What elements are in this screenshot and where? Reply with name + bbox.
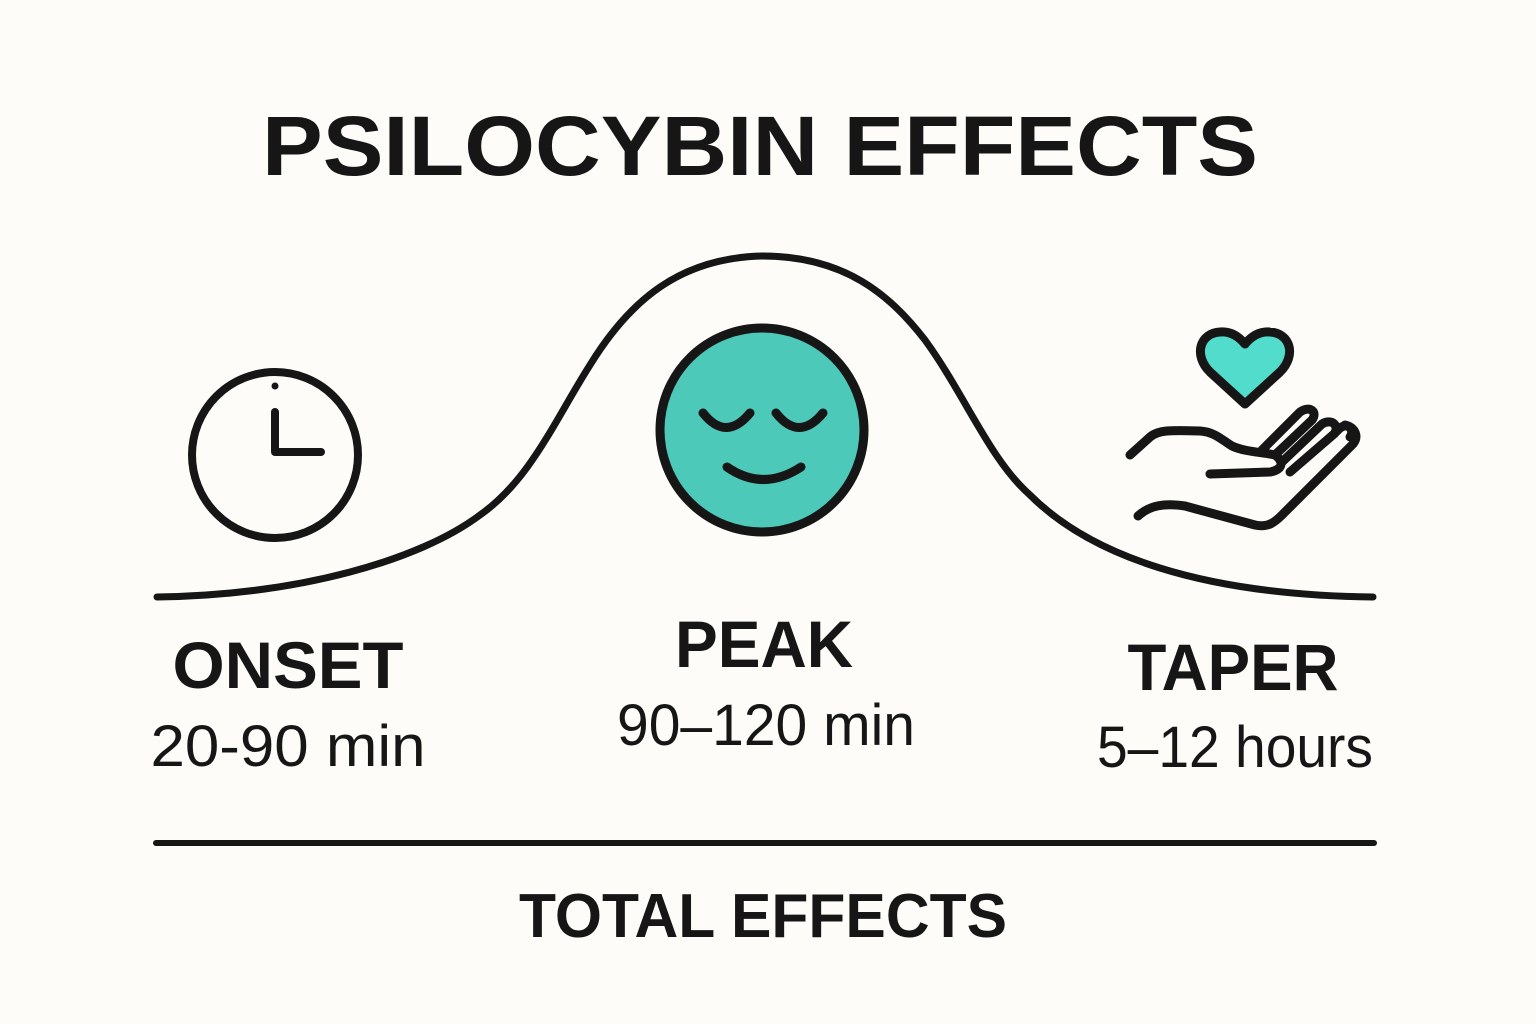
label: taper [1097,630,1373,780]
label: taper: 5–12 hours [1097,715,1373,780]
total duration line [156,840,1374,846]
title: PSILOCYBIN EFFECTS [262,99,1258,193]
icon: calm face [660,328,864,532]
label: peak: PEAK [675,607,853,681]
icon: clock [192,372,358,538]
effects curve [157,256,1373,597]
label: peak: 90–120 min [617,693,915,758]
label: onset: 20-90 min [150,714,426,779]
label: taper: TAPER [1128,630,1338,704]
hand [1130,431,1281,474]
label: onset [150,628,426,779]
heart [1200,332,1290,404]
label: total effects: TOTAL EFFECTS [519,882,1007,951]
icon: hand holding heart [1130,332,1356,526]
label: onset: ONSET [172,628,404,702]
label: peak [617,607,915,758]
